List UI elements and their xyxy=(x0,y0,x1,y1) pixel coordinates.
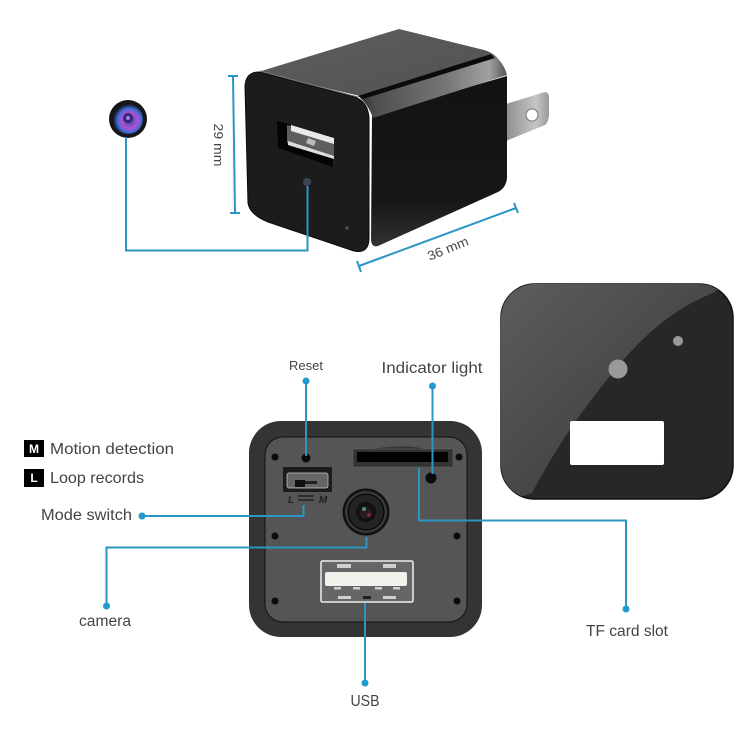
callout: camera: camera xyxy=(79,613,131,630)
USB port xyxy=(277,121,334,167)
callout: USB: USB xyxy=(350,693,380,710)
charger side face xyxy=(371,76,507,246)
callout: TF card slot: TF card slot xyxy=(586,623,669,640)
dimension: 36 mm: 36 mm xyxy=(425,234,471,264)
charger front face xyxy=(245,72,369,251)
camera module xyxy=(342,488,390,536)
plug prong xyxy=(506,92,549,141)
dimension: 29 mm: 29 mm xyxy=(211,124,226,166)
charger top face xyxy=(258,29,500,96)
USB cutout xyxy=(570,421,664,465)
callout: Indicator light: Indicator light xyxy=(382,360,483,377)
panel: glossy front view xyxy=(495,278,735,505)
reset hole xyxy=(302,454,310,462)
callout: TF card slot xyxy=(419,468,669,640)
callout: camera xyxy=(79,537,366,630)
USB port xyxy=(321,561,413,602)
screws xyxy=(272,454,462,604)
legend: L Loop records: Loop records xyxy=(50,470,144,487)
callout: USB xyxy=(350,603,380,710)
charger product illustration xyxy=(245,29,549,251)
indicator hole xyxy=(673,336,683,346)
mode switch: L xyxy=(288,495,294,506)
legend: M Motion detection: M xyxy=(29,442,39,456)
callout: Reset xyxy=(289,358,323,456)
indicator dot xyxy=(345,226,349,230)
mode switch: M xyxy=(319,495,328,506)
dimension: 29 mm xyxy=(211,76,240,213)
connector: lens to camera hole xyxy=(126,137,308,250)
callout: Reset: Reset xyxy=(289,358,323,373)
side edge highlight band xyxy=(358,54,507,118)
dimension: 36 mm xyxy=(357,203,518,272)
glossy reflection xyxy=(501,284,718,496)
camera lens icon xyxy=(109,100,147,138)
indicator light xyxy=(426,472,436,484)
mode switch xyxy=(283,467,332,506)
camera hole xyxy=(303,178,311,186)
legend: M Motion detection: Motion detection xyxy=(50,441,174,458)
callout: Mode switch xyxy=(41,505,304,524)
callout: Mode switch: Mode switch xyxy=(41,507,132,524)
camera hole xyxy=(608,360,628,378)
legend: L Loop records: L xyxy=(30,471,38,485)
panel: device interior view xyxy=(249,421,482,637)
callout: Indicator light xyxy=(382,360,483,474)
TF card slot xyxy=(353,446,453,467)
